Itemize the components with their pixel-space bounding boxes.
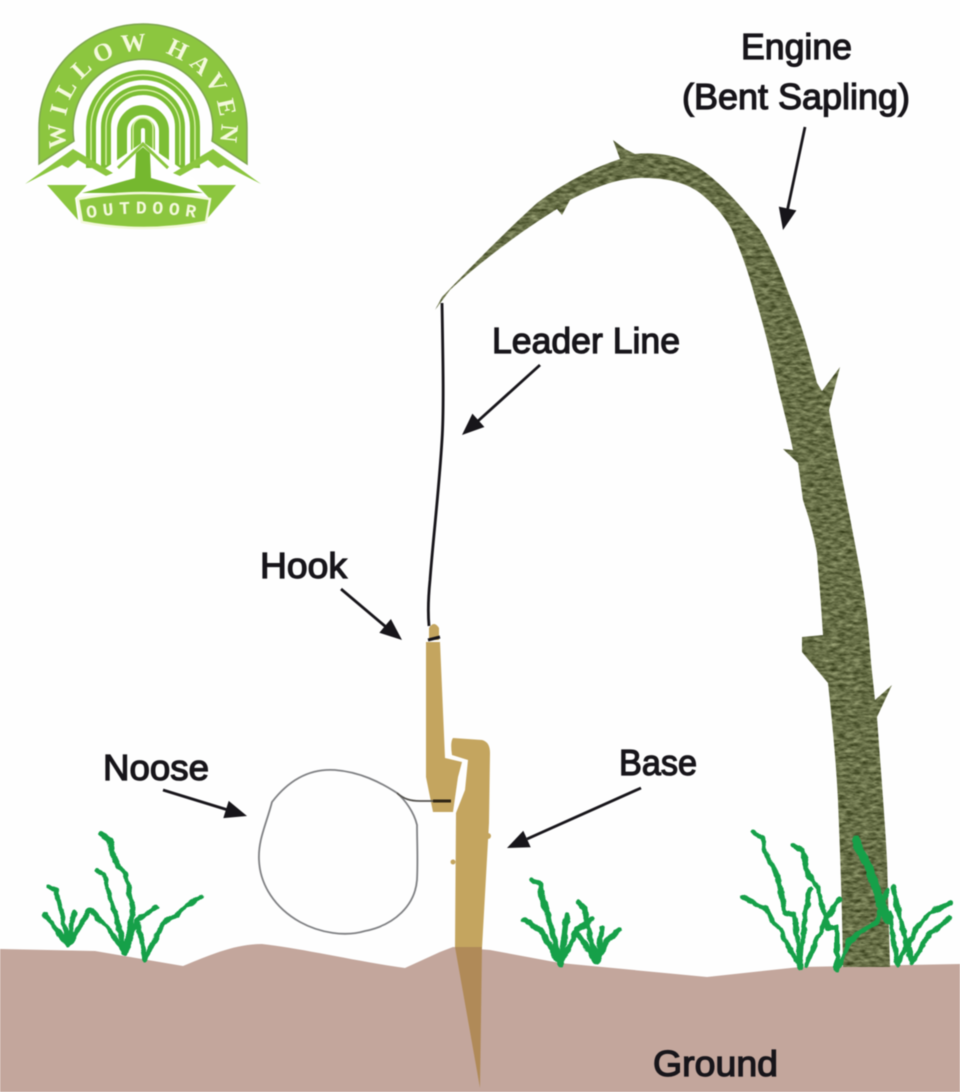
noose knot	[433, 800, 451, 802]
label: Hook: Hook	[260, 545, 348, 586]
logo plaque text: OUTDOOR	[86, 200, 197, 218]
leader knot	[428, 637, 440, 640]
grass clump middle	[525, 880, 620, 965]
label: Noose: Noose	[103, 747, 209, 788]
noose	[259, 770, 451, 934]
label: Engine (Bent Sapling)	[682, 26, 910, 117]
grass clump right	[743, 832, 950, 970]
noose loop	[259, 770, 417, 934]
noose tail	[397, 793, 433, 801]
label: Base: Base	[619, 742, 697, 783]
logo concentric arches	[91, 75, 195, 172]
ground	[0, 944, 960, 1092]
grass clump left	[45, 833, 200, 960]
logo: Willow Haven Outdoor	[25, 22, 261, 230]
logo arched text: WILLOW HAVEN	[48, 33, 239, 150]
sapling engine	[435, 140, 892, 967]
label: Ground: Ground	[653, 1043, 778, 1084]
label: Leader Line: Leader Line	[492, 320, 680, 361]
Engine text: Engine	[741, 26, 852, 67]
arrow: noose	[163, 790, 247, 818]
arrow: base	[507, 788, 641, 848]
hook	[426, 624, 462, 812]
hook body	[426, 642, 462, 812]
logo mountains	[25, 142, 261, 193]
hook tip	[429, 624, 439, 640]
logo ribbon right	[197, 185, 236, 220]
logo plaque	[78, 193, 210, 228]
arrow: hook	[341, 589, 402, 640]
stake nubs	[485, 833, 491, 839]
logo ribbon left	[47, 185, 87, 220]
Bent Sapling text: (Bent Sapling)	[682, 76, 910, 117]
logo arch band	[39, 24, 247, 164]
base stake	[450, 738, 491, 1088]
leader line	[428, 303, 443, 626]
arrow: engine	[779, 127, 805, 230]
arrow: leader line	[462, 365, 540, 435]
stake above ground	[451, 738, 490, 948]
stake below ground	[455, 947, 482, 1088]
